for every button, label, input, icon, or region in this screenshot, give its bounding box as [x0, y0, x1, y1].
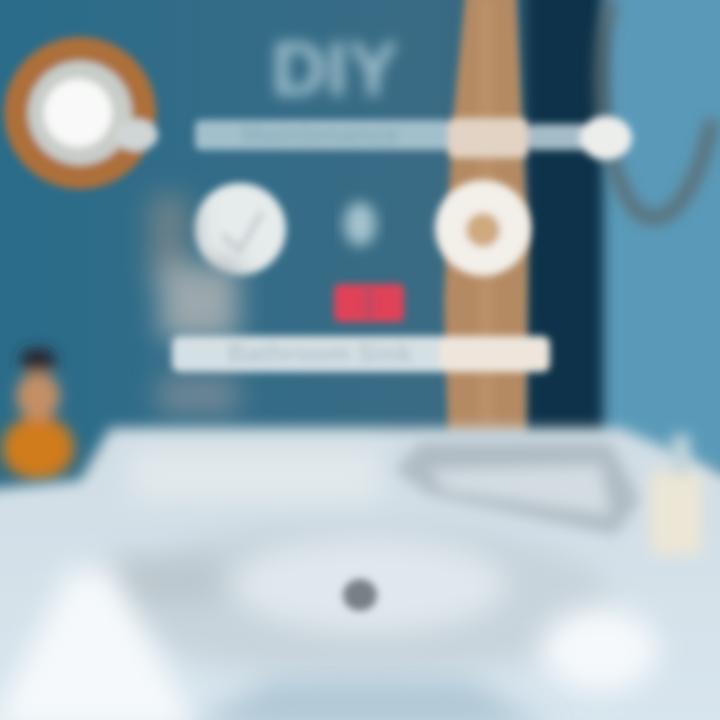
banner: upper label strip [195, 116, 632, 160]
banner: upper label strip: Maintenance [241, 119, 399, 149]
icon: right white circle with wood centre [435, 180, 531, 276]
icon: orange ring with white centre [16, 49, 158, 177]
icon: red badge [334, 284, 404, 322]
heading: DIY [272, 27, 398, 112]
icon: hanging hose at top right [601, 0, 712, 218]
panel: white sink counter [0, 428, 720, 720]
panel: wooden vertical strip [444, 0, 528, 436]
bottom blue shadow [190, 680, 550, 720]
soap bottle [650, 435, 702, 555]
panel: teal wall background [0, 0, 720, 470]
icon: left white circle [194, 183, 286, 275]
icon: grey bottle column on left [150, 195, 238, 415]
sink highlight bands [0, 450, 658, 720]
icon: small centre symbol [344, 202, 376, 246]
icon: orange toy figure [2, 348, 74, 480]
banner: lower label strip [172, 336, 550, 372]
faucet [395, 442, 640, 535]
drain [343, 579, 377, 611]
banner: lower label strip: Bathroom Sink [228, 338, 413, 368]
sink basin [110, 522, 610, 678]
